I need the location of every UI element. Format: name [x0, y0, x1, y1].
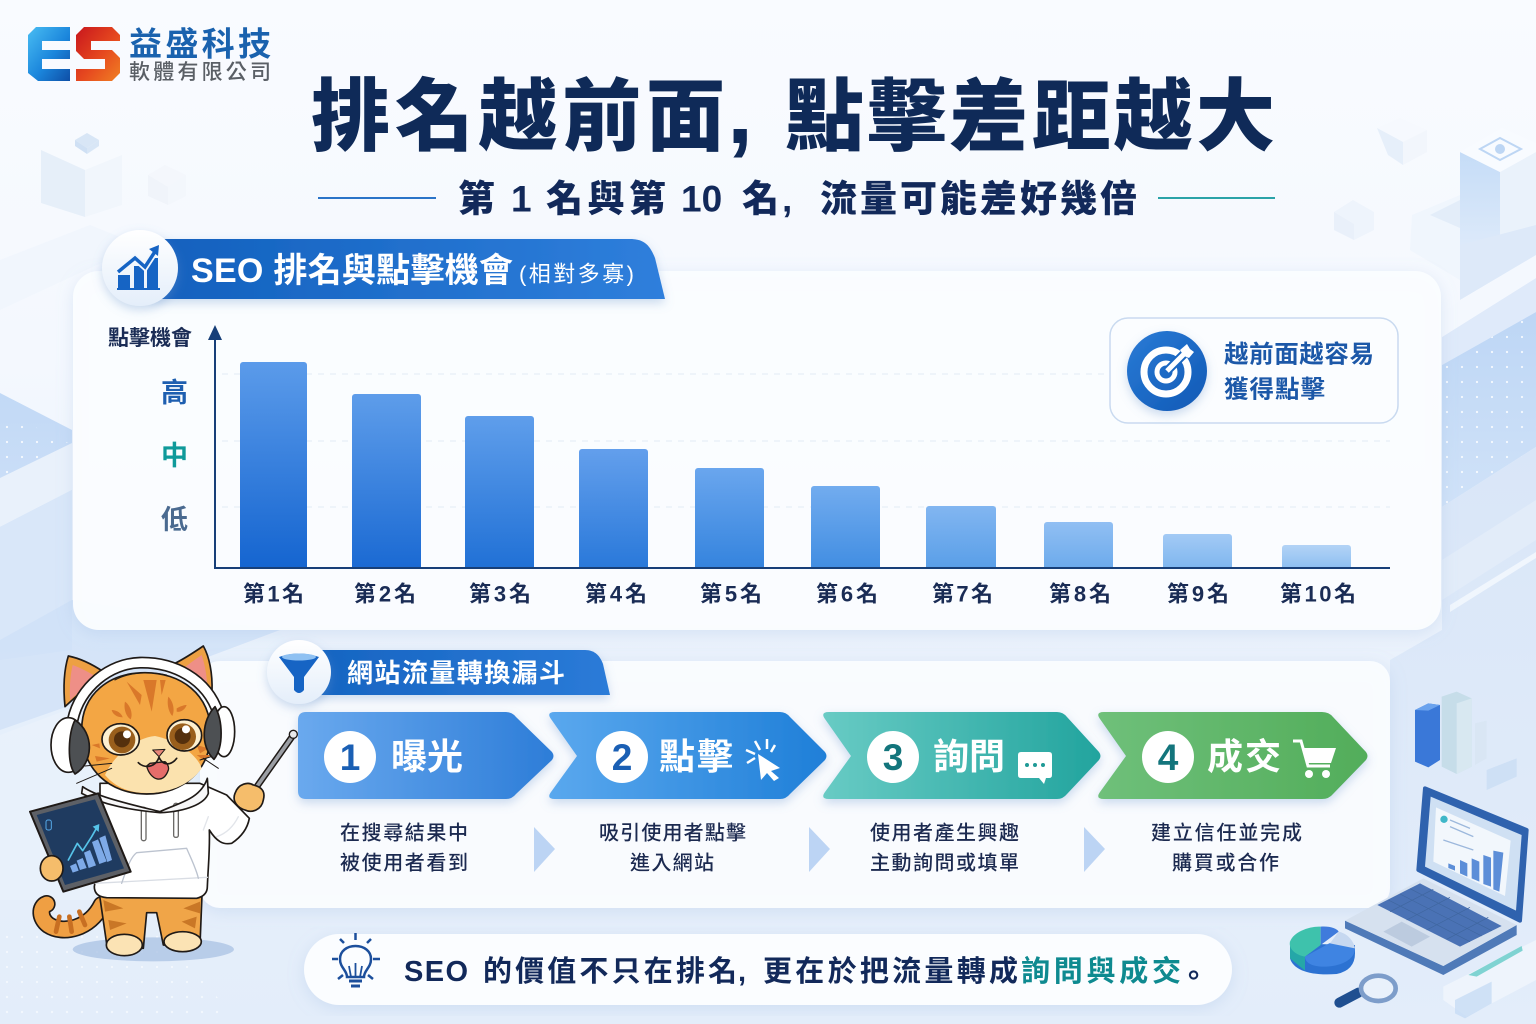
hand with pointer — [234, 783, 264, 811]
step 1 chevron — [298, 712, 554, 799]
step descriptions: 被使用者看到 — [340, 852, 468, 875]
step descriptions: 主動詢問或填單 — [870, 852, 1019, 875]
callout: higher rank gets more clicks: 獲得點擊 — [1224, 376, 1326, 404]
x-axis labels: 第6名 — [816, 582, 878, 606]
x-axis labels — [243, 582, 1356, 606]
step descriptions: 在搜尋結果中 — [340, 822, 468, 845]
y-axis label: 點擊機會 — [108, 326, 192, 350]
x-axis labels: 第1名 — [243, 582, 304, 606]
drawstrings — [141, 803, 178, 841]
step descriptions: 進入網站 — [630, 852, 714, 875]
x-axis labels: 第4名 — [585, 582, 647, 606]
x-axis labels: 第3名 — [469, 582, 531, 606]
arrows between steps — [534, 827, 1105, 872]
eyes — [102, 720, 202, 755]
step descriptions — [340, 822, 1302, 875]
ribbon title: 網站流量轉換漏斗 — [347, 658, 565, 688]
subtitle — [318, 178, 1275, 220]
step descriptions: 使用者產生興趣 — [870, 822, 1019, 845]
subtitle: 10 — [681, 178, 722, 220]
nose and mouth — [138, 749, 177, 779]
logo mark E — [28, 27, 70, 81]
decoration: right tower — [1334, 118, 1536, 300]
chart heading ribbon — [102, 230, 665, 306]
pie chart — [1290, 927, 1355, 974]
subtitle: 名與第 — [546, 178, 666, 220]
icon: light bulb — [332, 933, 380, 986]
y level: medium: 中 — [161, 441, 188, 471]
logo — [28, 26, 271, 84]
title: 點擊差距越大 — [785, 72, 1275, 161]
subtitle: 第 — [458, 178, 495, 220]
panel: SEO ranking chart — [73, 271, 1441, 630]
headphones — [51, 663, 235, 774]
message text: 更在於把流量轉成 — [763, 955, 1018, 988]
subtitle: , — [782, 178, 792, 220]
step 4 chevron — [1098, 712, 1368, 799]
hood — [82, 778, 208, 813]
icon: funnel — [267, 640, 331, 704]
message text: , — [738, 956, 746, 988]
x-axis labels: 第10名 — [1280, 582, 1356, 606]
company name: 益盛科技 — [129, 26, 271, 62]
callout text: 越前面越容易 — [1224, 340, 1374, 368]
hand with tablet — [40, 856, 63, 881]
icon: target — [1127, 331, 1207, 411]
icon: cart — [1293, 741, 1336, 778]
pocket — [122, 848, 198, 883]
x-axis labels: 第7名 — [932, 582, 993, 606]
step descriptions: 建立信任並完成 — [1151, 822, 1302, 845]
feet — [106, 934, 142, 956]
step 4 chevron: 成交 — [1207, 736, 1281, 777]
step 4 chevron: 4 — [1158, 737, 1179, 778]
closing message pill — [304, 933, 1232, 1005]
callout: higher rank gets more clicks — [1110, 318, 1398, 423]
subtitle: 名 — [742, 178, 779, 220]
panel: funnel — [200, 661, 1390, 908]
axes — [208, 325, 1390, 569]
laptop screen — [1418, 788, 1527, 921]
x-axis labels: 第2名 — [354, 582, 416, 606]
logo mark S — [76, 27, 120, 81]
message text: 。 — [1179, 961, 1208, 993]
illustration: laptop and charts — [1290, 692, 1536, 1018]
face stripes — [92, 680, 212, 762]
ribbon title: SEO 排名與點擊機會 — [191, 252, 513, 290]
company subtitle: 軟體有限公司 — [129, 61, 271, 84]
legs — [98, 887, 202, 948]
muzzle — [105, 736, 202, 793]
step descriptions: 購買或合作 — [1172, 852, 1279, 875]
decoration: left blocks — [0, 133, 186, 310]
hoodie body — [94, 783, 249, 898]
bars — [240, 362, 1351, 567]
shelf — [1443, 940, 1536, 1018]
message text: 的價值不只在排名 — [483, 955, 737, 988]
icon: click cursor — [746, 739, 780, 781]
step 2 chevron: 點擊 — [659, 736, 733, 777]
message text: 詢問與成交 — [1021, 955, 1181, 988]
shadow — [73, 937, 234, 961]
step descriptions: 吸引使用者點擊 — [599, 822, 746, 845]
step 3 chevron: 詢問 — [933, 736, 1005, 777]
subtitle: 1 — [511, 178, 532, 220]
title: , — [727, 58, 753, 163]
step 2 chevron — [549, 712, 826, 799]
ribbon note: (相對多寡) — [519, 262, 634, 286]
message text: SEO — [404, 956, 470, 988]
x-axis labels: 第8名 — [1049, 582, 1111, 606]
pointer stick — [243, 730, 297, 807]
step 3 chevron: 3 — [883, 737, 903, 778]
whiskers — [77, 755, 218, 783]
magnifier — [1339, 976, 1396, 1003]
illustration: cat mascot — [30, 646, 297, 961]
step 1 chevron: 1 — [340, 737, 360, 778]
y level: high: 高 — [161, 378, 188, 408]
ears — [64, 656, 103, 707]
step 2 chevron: 2 — [612, 737, 632, 778]
x-axis labels: 第9名 — [1167, 582, 1229, 606]
step 3 chevron — [823, 712, 1100, 799]
grid lines — [222, 374, 1390, 507]
icon: chat bubble — [1018, 752, 1052, 784]
3D bars — [1415, 692, 1517, 790]
title: 排名越前面 — [311, 72, 725, 161]
tail — [41, 904, 102, 932]
x-axis labels: 第5名 — [700, 582, 762, 606]
funnel heading ribbon — [267, 640, 610, 704]
icon: growth chart — [102, 230, 178, 306]
tablet — [30, 793, 131, 892]
laptop base — [1345, 878, 1517, 975]
step 1 chevron: 曝光 — [391, 736, 463, 777]
y level: low: 低 — [161, 505, 188, 535]
head — [82, 673, 211, 794]
subtitle: 流量可能差好幾倍 — [820, 178, 1137, 220]
